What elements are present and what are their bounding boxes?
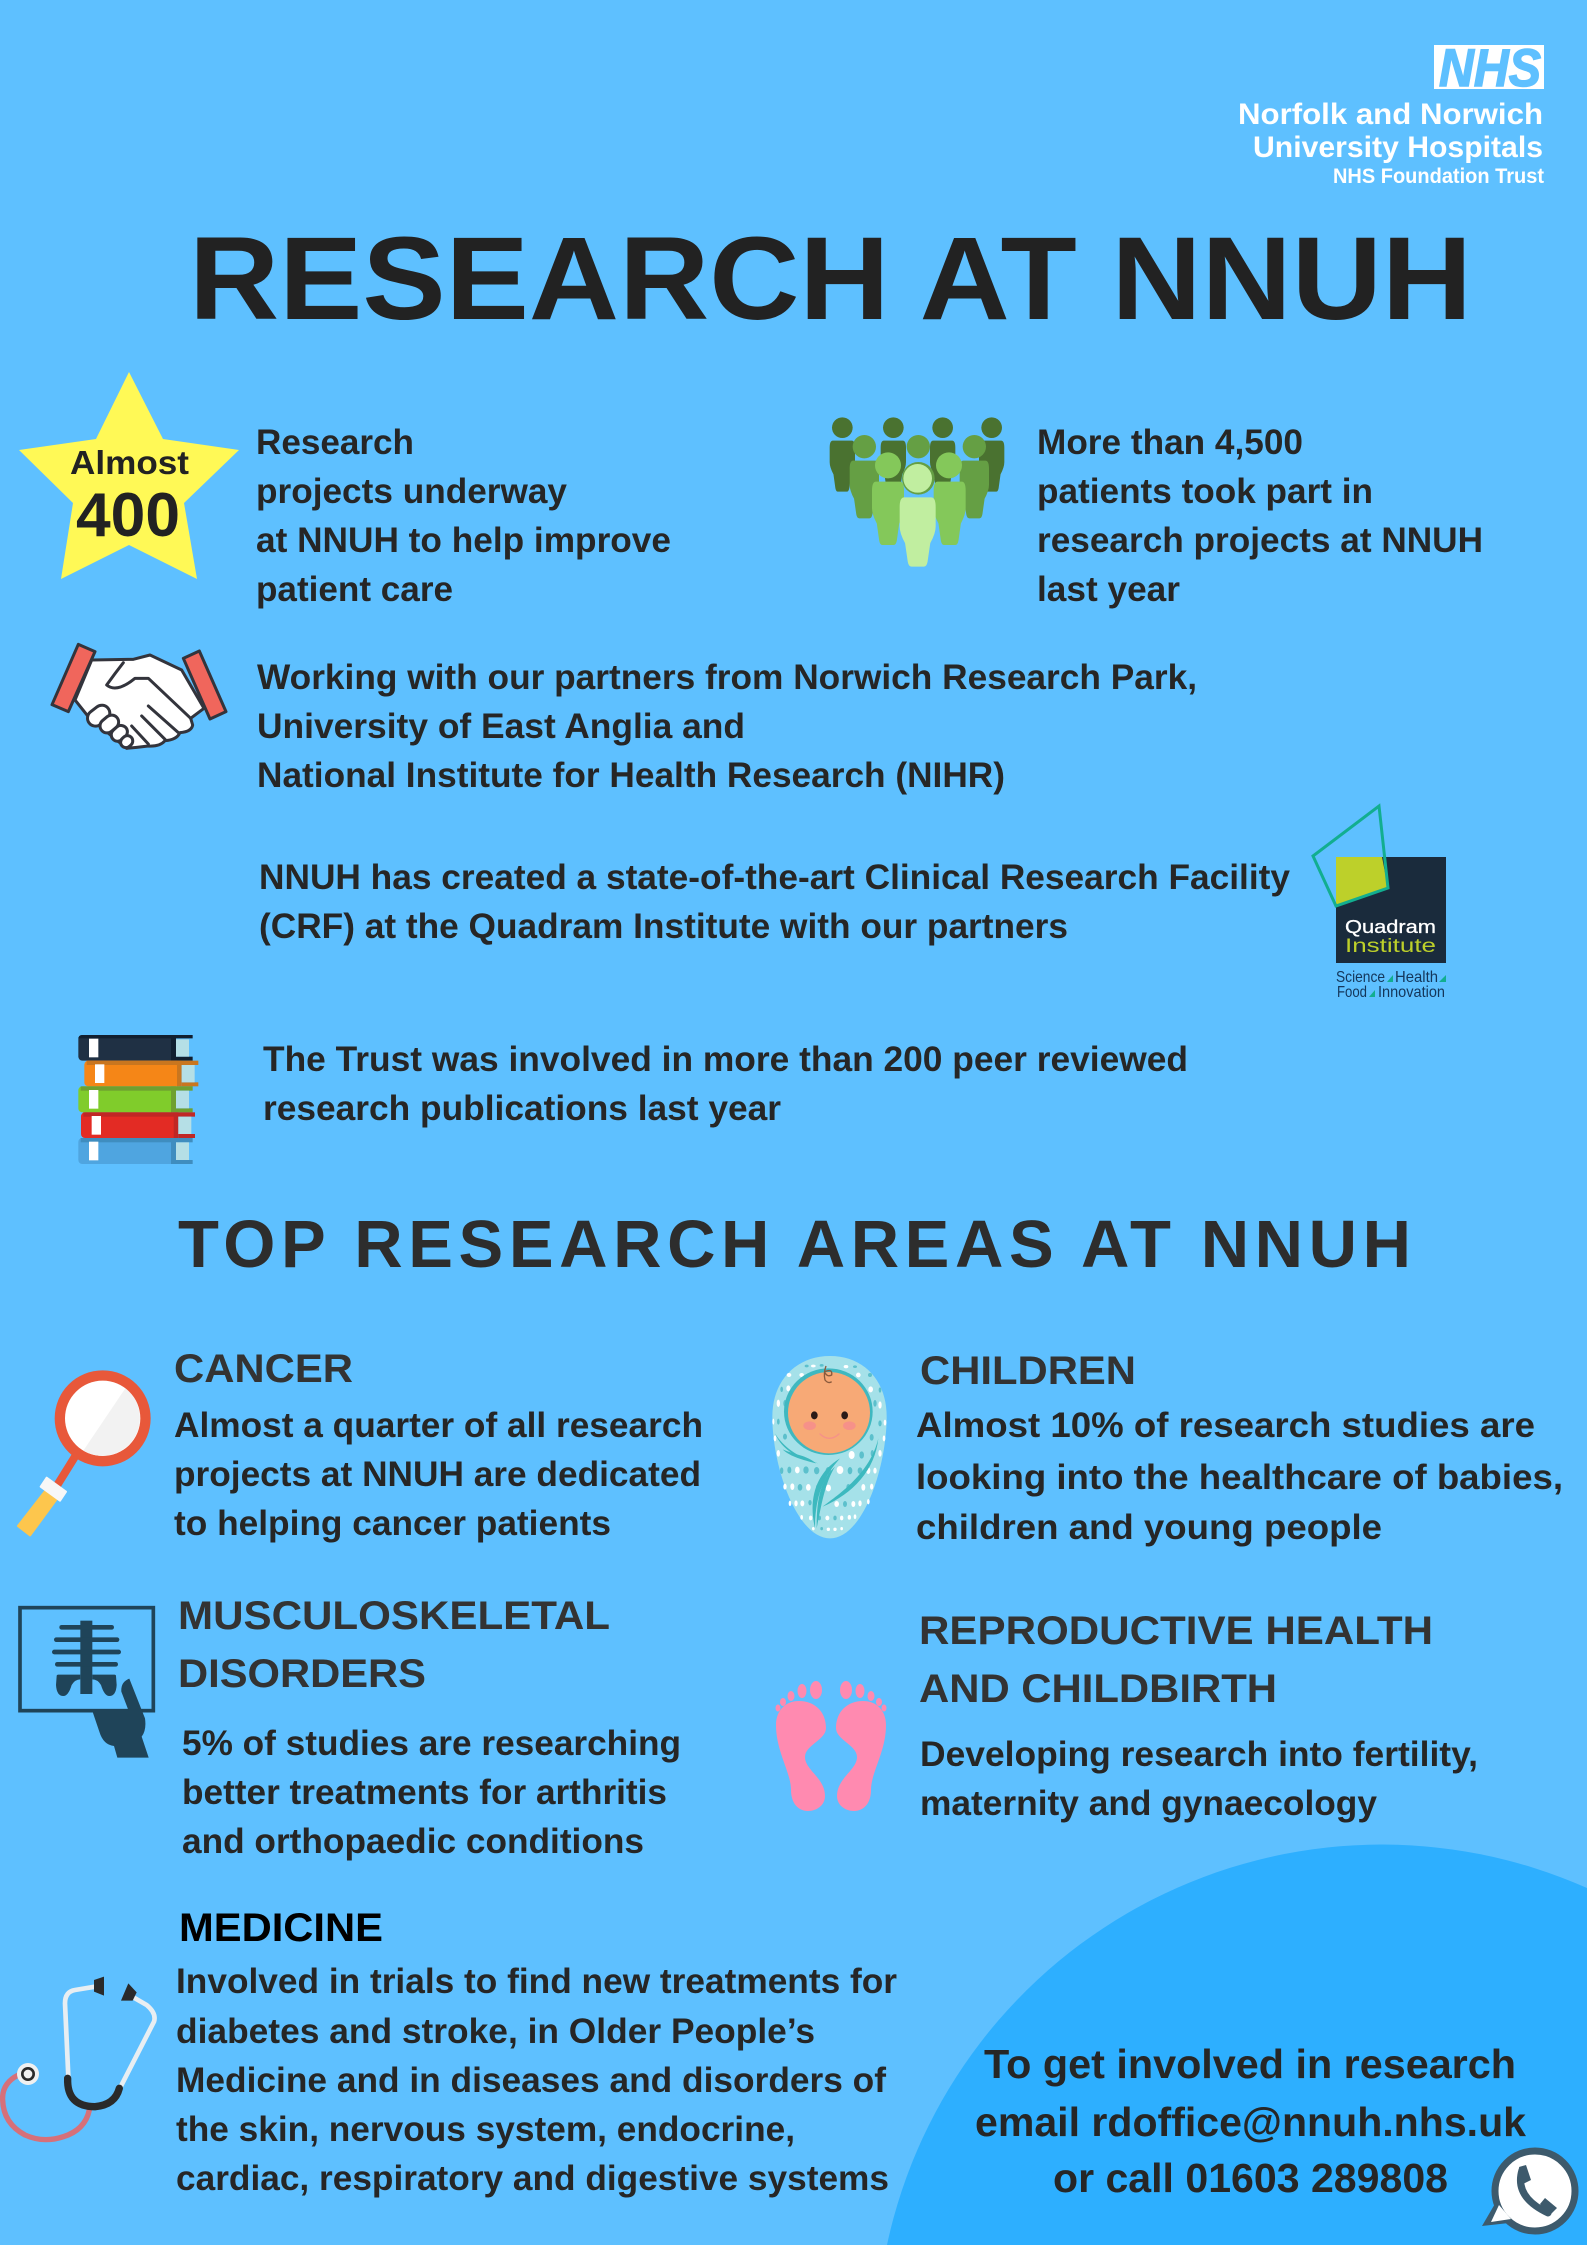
callout: contact details xyxy=(975,2041,1526,2201)
panel: children: Almost 10% of research studies are xyxy=(916,1406,1535,1445)
NHS trust logo xyxy=(1238,39,1544,188)
text: partners: Working with our partners from Norwich Research Park, xyxy=(257,658,1197,697)
panel: musculoskeletal disorders: DISORDERS xyxy=(178,1652,426,1696)
panel: children: looking into the healthcare of babies, xyxy=(916,1458,1563,1497)
Quadram Institute logo: Quadram xyxy=(1345,917,1436,937)
panel: medicine: MEDICINE xyxy=(179,1906,383,1950)
panel: medicine: the skin, nervous system, endocrine, xyxy=(176,2110,795,2149)
panel: medicine: diabetes and stroke, in Older People’s xyxy=(176,2012,815,2051)
panel: children: CHILDREN xyxy=(920,1349,1136,1393)
panel: children xyxy=(916,1349,1563,1547)
Quadram Institute logo: Science xyxy=(1336,969,1385,986)
Quadram Institute logo: Innovation xyxy=(1378,984,1445,1001)
text: patients took part: More than 4,500 xyxy=(1037,423,1303,462)
icon: stethoscope xyxy=(3,1977,155,2140)
panel: medicine: Medicine and in diseases and disorders of xyxy=(176,2061,886,2100)
panel: musculoskeletal disorders: better treatments for arthritis xyxy=(182,1773,667,1812)
panel: medicine xyxy=(176,1906,897,2198)
Quadram Institute logo: Health xyxy=(1395,969,1438,986)
icon: phone speech bubble xyxy=(1482,2151,1575,2231)
icon: swaddled baby xyxy=(772,1356,887,1538)
panel: cancer: projects at NNUH are dedicated xyxy=(174,1455,701,1494)
text: research projects: projects underway xyxy=(256,472,568,511)
star badge: almost 400: 400 xyxy=(76,481,180,550)
panel: reproductive health and childbirth: Developing research into fertility, xyxy=(920,1735,1478,1774)
NHS trust logo: NHS Foundation Trust xyxy=(1333,165,1544,188)
NHS trust logo: University Hospitals xyxy=(1253,131,1543,164)
panel: medicine: Involved in trials to find new treatments for xyxy=(176,1962,897,2001)
Quadram Institute logo: Institute xyxy=(1345,936,1436,957)
Quadram Institute logo: Food xyxy=(1337,984,1367,1001)
text: publications xyxy=(263,1040,1188,1128)
panel: reproductive health and childbirth: maternity and gynaecology xyxy=(920,1784,1378,1823)
contact background circle xyxy=(887,1845,1587,2245)
NHS trust logo: Norfolk and Norwich xyxy=(1238,98,1543,131)
panel: children: children and young people xyxy=(916,1508,1382,1547)
panel: musculoskeletal disorders: and orthopaedic conditions xyxy=(182,1822,644,1861)
panel: musculoskeletal disorders: MUSCULOSKELETAL xyxy=(178,1594,610,1638)
text: research projects: at NNUH to help improve xyxy=(256,521,671,560)
icon: pink footprints xyxy=(776,1681,886,1811)
callout: contact details: To get involved in research xyxy=(984,2041,1516,2087)
text: patients took part xyxy=(1037,423,1483,609)
icon: stack of books xyxy=(78,1035,198,1164)
panel: cancer xyxy=(174,1347,703,1543)
panel: musculoskeletal disorders xyxy=(178,1594,681,1861)
callout: contact details: email rdoffice@nnuh.nhs.uk xyxy=(975,2099,1526,2145)
panel: reproductive health and childbirth: REPRODUCTIVE HEALTH xyxy=(919,1609,1433,1653)
icon: group of people xyxy=(830,417,1004,567)
text: patients took part: research projects at NNUH xyxy=(1037,521,1483,560)
heading: top research areas: TOP RESEARCH AREAS AT NNUH xyxy=(178,1207,1411,1282)
text: publications: The Trust was involved in more than 200 peer reviewed xyxy=(263,1040,1188,1079)
icon: handshake xyxy=(52,644,226,750)
panel: reproductive health and childbirth xyxy=(919,1609,1478,1823)
text: clinical research facility: NNUH has created a state-of-the-art Clinical Research Facility xyxy=(259,858,1291,897)
panel: cancer: to helping cancer patients xyxy=(174,1504,611,1543)
Quadram Institute logo xyxy=(1313,806,1446,1001)
panel: reproductive health and childbirth: AND CHILDBIRTH xyxy=(919,1667,1277,1711)
icon: magnifying glass xyxy=(18,1370,151,1535)
text: partners xyxy=(257,658,1197,795)
text: patients took part: patients took part in xyxy=(1037,472,1373,511)
NHS trust logo: NHS xyxy=(1439,39,1541,98)
text: clinical research facility: (CRF) at the Quadram Institute with our partners xyxy=(259,907,1068,946)
star badge: almost 400: Almost xyxy=(70,444,189,481)
star badge: almost 400 xyxy=(19,372,239,579)
text: research projects: Research xyxy=(256,423,414,462)
callout: contact details: or call 01603 289808 xyxy=(1053,2155,1448,2201)
text: research projects: patient care xyxy=(256,570,453,609)
text: publications: research publications last year xyxy=(263,1089,781,1128)
panel: medicine: cardiac, respiratory and digestive systems xyxy=(176,2159,889,2198)
text: research projects xyxy=(256,423,671,609)
text: clinical research facility xyxy=(259,858,1291,946)
text: patients took part: last year xyxy=(1037,570,1180,609)
panel: musculoskeletal disorders: 5% of studies are researching xyxy=(182,1724,681,1763)
panel: cancer: CANCER xyxy=(174,1347,353,1391)
text: partners: National Institute for Health Research (NIHR) xyxy=(257,756,1005,795)
text: partners: University of East Anglia and xyxy=(257,707,745,746)
panel: cancer: Almost a quarter of all research xyxy=(174,1406,703,1445)
title: RESEARCH AT NNUH xyxy=(189,213,1472,345)
icon: x-ray with hand xyxy=(20,1608,153,1758)
